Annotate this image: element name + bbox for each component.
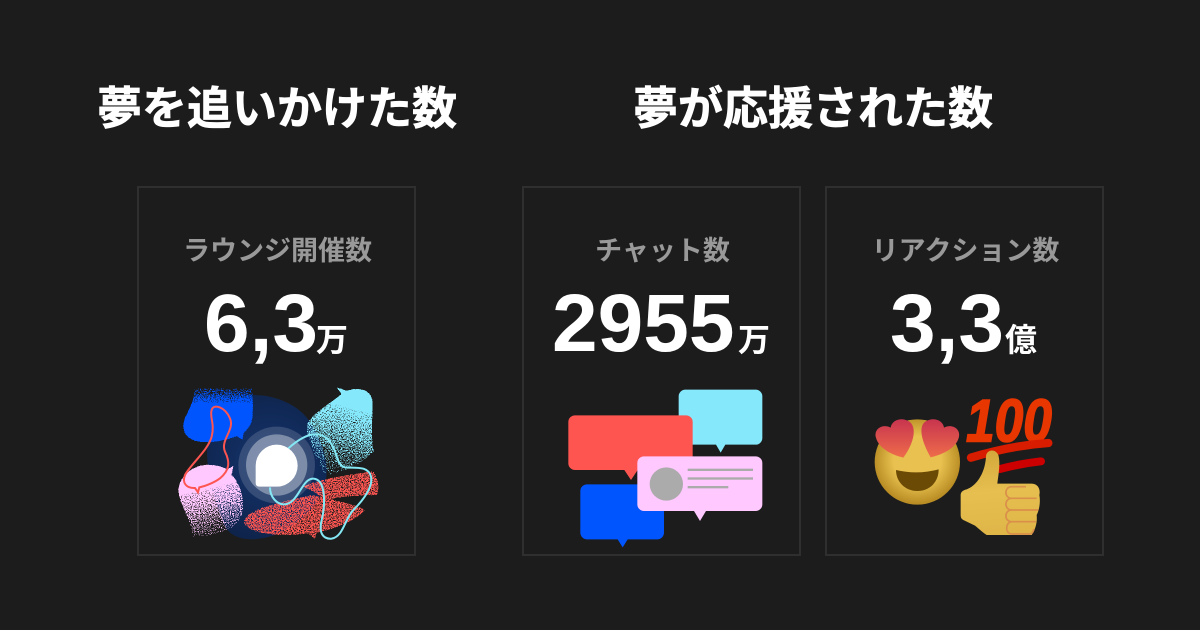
panel frame: [138, 187, 415, 555]
red noise bubble lower: [244, 495, 365, 539]
avatar: [650, 467, 683, 501]
thumbs up: [961, 450, 1040, 535]
heading: dreams supported: 夢が応援された数: [633, 83, 993, 134]
icon: reaction emoji: [875, 387, 1052, 535]
panel label: ラウンジ開催数: [183, 236, 372, 266]
stat value: 6,3: [204, 278, 318, 369]
white center bubble: [256, 445, 298, 487]
stat value: 万: [738, 322, 770, 358]
hundred points: 100: [966, 387, 1052, 455]
cyan outline path: [270, 434, 371, 539]
cyan bubble: [679, 390, 762, 453]
stat value: 2955: [552, 278, 734, 369]
heading: dreams chased: 夢を追いかけた数: [97, 83, 457, 134]
red noise bubble upper: [303, 472, 378, 500]
panel frame: [523, 187, 800, 555]
panel: lounges held: [138, 187, 415, 555]
panel: reactions: [826, 187, 1103, 555]
icon: chat bubbles: [568, 390, 762, 547]
blue noise bubble: [183, 388, 253, 442]
pink noise bubble: [178, 465, 243, 537]
panel label: リアクション数: [872, 236, 1059, 266]
navy backdrop blob: [207, 395, 327, 539]
cyan noise bubble: [307, 387, 374, 475]
stat value: 3,3: [890, 278, 1004, 369]
blue bubble: [580, 484, 664, 547]
stat value: 万: [316, 322, 348, 358]
red outline bubble: [184, 407, 231, 492]
glow rings: [238, 427, 315, 503]
pink message bubble: [637, 456, 762, 521]
icon: lounge speech blobs: [178, 387, 378, 539]
panel: chats: [523, 187, 800, 555]
panel frame: [826, 187, 1103, 555]
red bubble: [568, 415, 693, 480]
message lines: [688, 469, 753, 488]
heart-eyes face: [875, 419, 960, 505]
panel label: チャット数: [595, 236, 730, 266]
stat value: 億: [1005, 322, 1037, 358]
